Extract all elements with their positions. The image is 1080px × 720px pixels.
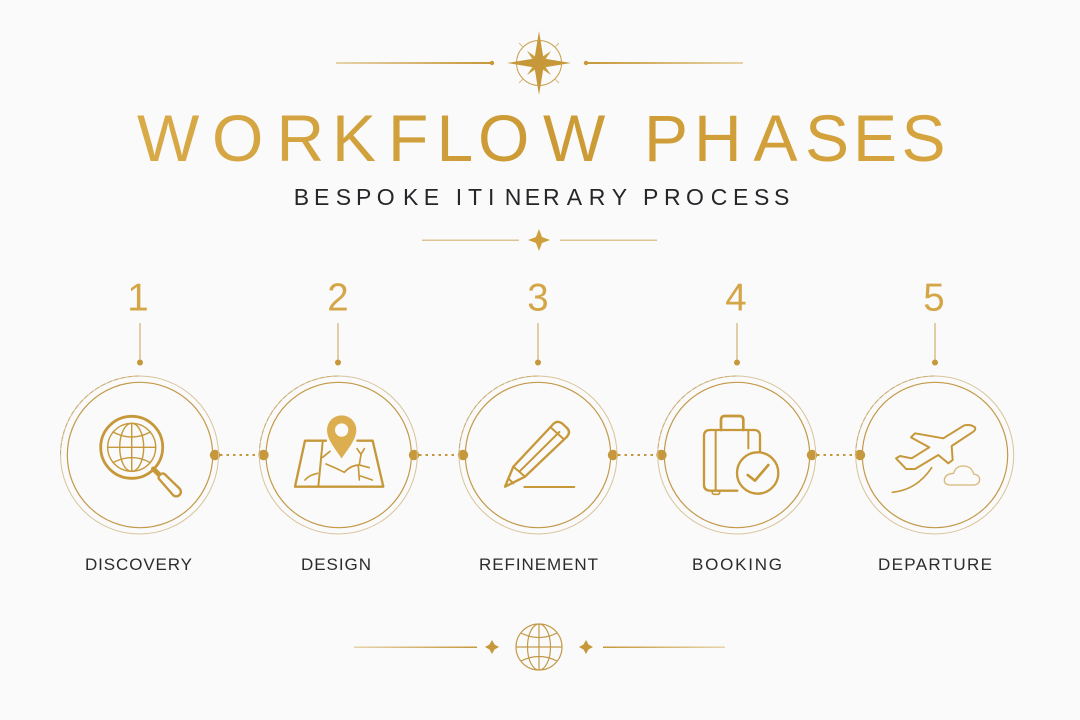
stem 5: [932, 323, 938, 366]
phase 2: design: [259, 276, 417, 574]
phase 3: refinement: [459, 276, 617, 574]
label departure: DEPARTURE: [878, 555, 992, 574]
stem 4: [734, 323, 740, 366]
number 1: 1: [127, 276, 149, 320]
number 4: 4: [725, 276, 747, 320]
icon: pencil: [505, 422, 574, 487]
rings 2: [259, 376, 417, 534]
icon: magnifying glass with globe: [101, 416, 181, 496]
label refinement: REFINEMENT: [479, 555, 598, 574]
icon: map with pin: [295, 415, 383, 487]
top compass ornament: [336, 31, 743, 95]
rings 4: [658, 376, 816, 534]
phase 4: booking: [658, 276, 816, 574]
rings 3: [459, 376, 617, 534]
connector 1-2: [210, 450, 269, 460]
connector 2-3: [409, 450, 468, 460]
icon: suitcase with check: [704, 416, 778, 494]
label discovery: DISCOVERY: [85, 555, 192, 574]
connector 3-4: [608, 450, 667, 460]
subtitle: BESPOKE ITINERARY PROCESS: [294, 184, 789, 210]
phase 5: departure: [856, 276, 1014, 574]
number 2: 2: [327, 276, 349, 320]
rings 1: [60, 376, 218, 534]
bottom globe ornament: [354, 624, 725, 670]
star divider: [422, 229, 657, 251]
phase 1: discovery: [60, 276, 218, 574]
title: WORKFLOW PHASES: [137, 101, 946, 175]
stem 1: [137, 323, 143, 366]
connector 4-5: [807, 450, 865, 460]
rings 5: [856, 376, 1014, 534]
stem 3: [535, 323, 541, 366]
icon: airplane with cloud: [892, 425, 980, 492]
label booking: BOOKING: [692, 555, 782, 574]
stem 2: [335, 323, 341, 366]
number 5: 5: [923, 276, 945, 320]
label design: DESIGN: [301, 555, 371, 574]
number 3: 3: [527, 276, 549, 320]
